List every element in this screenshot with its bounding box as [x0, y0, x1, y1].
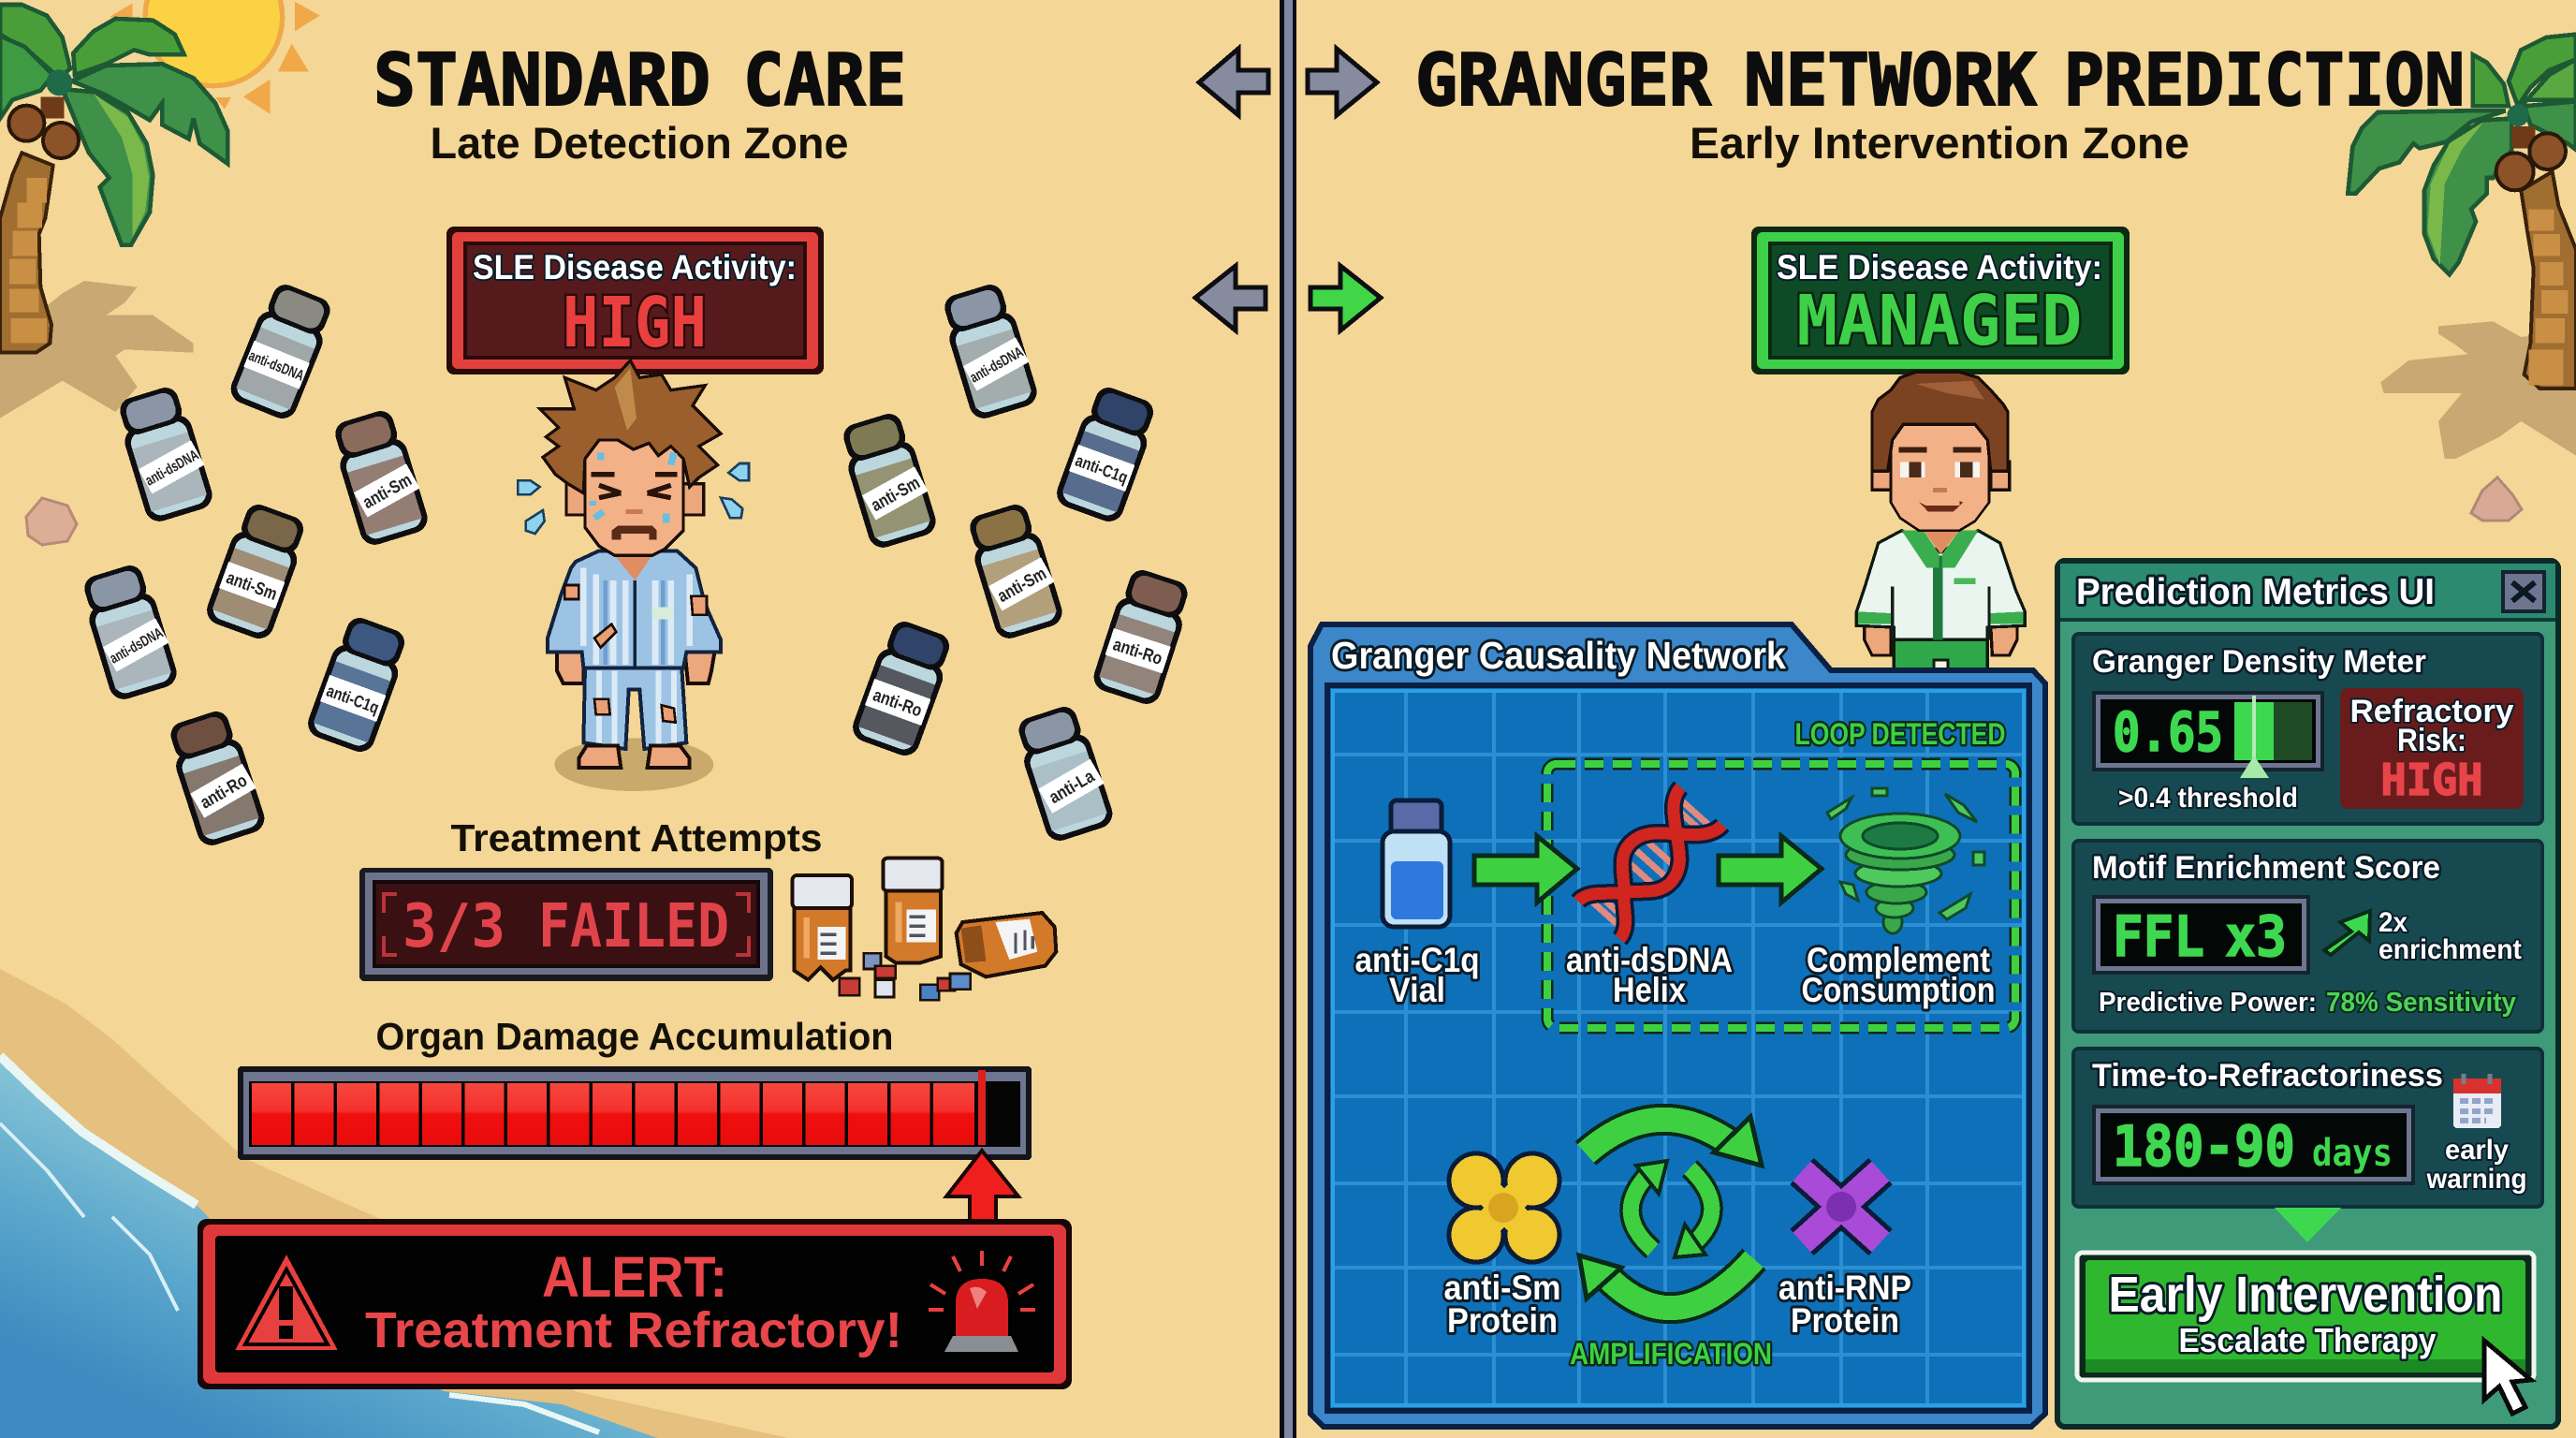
organ damage heading: Organ Damage Accumulation	[376, 1015, 893, 1058]
status box: high disease activity	[446, 227, 824, 374]
vial: anti-C1q 2: anti-C1q	[1073, 451, 1131, 487]
title: granger network prediction: GRANGER	[1415, 39, 1712, 123]
label: anti-C1q vial: anti-C1q	[1355, 941, 1479, 979]
vial: anti-Sm 3	[836, 409, 940, 551]
alert panel: treatment refractory: ALERT:	[542, 1245, 727, 1309]
label: anti-dsDNA helix: anti-dsDNA	[1566, 941, 1733, 979]
vial: anti-dsDNA 4	[937, 280, 1041, 422]
button: early intervention	[2077, 1253, 2534, 1380]
label: complement consumption: Complement	[1807, 941, 1990, 979]
metric card: granger density meter: HIGH	[2381, 755, 2482, 805]
label: anti-dsDNA helix: Helix	[1613, 971, 1686, 1009]
arrow: grey left lower	[1195, 266, 1266, 330]
metric card: time to refractoriness: early	[2445, 1135, 2509, 1166]
seashell left	[26, 498, 77, 545]
sun	[110, 0, 320, 114]
vial: anti-dsDNA 2	[112, 383, 216, 525]
metric card: time to refractoriness: days	[2312, 1132, 2393, 1175]
LED display: 3/3 failed: 3/3	[402, 892, 505, 961]
metric card: motif enrichment score: FFL	[2113, 904, 2204, 970]
status box: managed disease activity: SLE Disease Activity:	[1777, 248, 2102, 286]
vial: anti-Ro 3: anti-Ro	[871, 685, 925, 721]
heading: prediction metrics ui: Prediction Metrics UI	[2076, 572, 2435, 612]
icon: anti-C1q vial	[1383, 800, 1450, 927]
label: anti-RNP protein: Protein	[1791, 1301, 1899, 1340]
vial: anti-Sm 1: anti-Sm	[359, 470, 416, 513]
LED display: 3/3 failed: FAILED	[538, 892, 729, 961]
metric card: motif enrichment score: x3	[2225, 904, 2287, 970]
metric card: time to refractoriness: 180-90	[2113, 1114, 2295, 1180]
label: amplification: AMPLIFICATION	[1570, 1337, 1772, 1371]
close button	[2503, 572, 2544, 611]
heading: granger causality network: Granger Causality Network	[1331, 634, 1786, 677]
vial: anti-dsDNA 4: anti-dsDNA	[968, 345, 1026, 387]
progress bar: organ damage	[238, 1066, 1032, 1160]
patient character	[518, 360, 749, 791]
vial: anti-Ro 3	[849, 616, 958, 759]
arrow: vial to helix	[1474, 836, 1577, 902]
metric card: motif enrichment score: enrichment	[2378, 934, 2522, 965]
icon: dna helix	[1578, 787, 1722, 939]
vial: anti-La	[1011, 702, 1117, 844]
label: loop detected: LOOP DETECTED	[1795, 717, 2005, 751]
alert panel: treatment refractory	[198, 1219, 1072, 1389]
wet sand shoreline	[0, 969, 788, 1438]
subtitle: early intervention zone: Early Intervention Zone	[1690, 118, 2189, 168]
metric card: time to refractoriness	[2073, 1049, 2542, 1207]
label: anti-Sm protein: anti-Sm	[1443, 1269, 1561, 1307]
button: early intervention: Early Intervention	[2108, 1267, 2503, 1323]
palm shadow right	[2380, 321, 2576, 459]
vial: anti-Sm 4	[962, 500, 1066, 642]
label: anti-C1q vial	[1355, 941, 1479, 1009]
arrow: grey right upper	[1308, 49, 1377, 115]
arrow: green right lower	[1310, 266, 1381, 330]
icon: mouse cursor	[2484, 1341, 2531, 1414]
LED display: 3/3 failed	[359, 868, 773, 981]
arrow: metrics to intervention	[2275, 1208, 2341, 1242]
treatment attempts heading: Treatment Attempts	[451, 816, 822, 859]
panel: prediction metrics ui	[2057, 561, 2558, 1427]
label: anti-RNP protein	[1778, 1269, 1911, 1340]
subtitle: late detection zone: Late Detection Zone	[431, 118, 848, 168]
dashed loop region	[1547, 764, 2015, 1028]
icon: floating antibody vials	[77, 279, 1195, 849]
metric card: granger density meter	[2073, 634, 2542, 824]
vial: anti-Ro 1: anti-Ro	[198, 770, 251, 814]
icon: spilled pill bottles	[793, 858, 1056, 1000]
vial: anti-Sm 2	[203, 499, 312, 642]
status box: high disease activity: SLE Disease Activity:	[473, 248, 797, 286]
panel: granger causality network	[1310, 624, 2045, 1427]
arrow: grey left upper	[1199, 49, 1268, 115]
doctor character	[1856, 372, 2025, 671]
palm shadow left	[0, 281, 194, 418]
metric card: motif enrichment score: Motif Enrichment Score	[2092, 850, 2440, 886]
ocean water	[0, 1056, 657, 1438]
status box: managed disease activity	[1751, 227, 2130, 374]
metric card: motif enrichment score: 78% Sensitivity	[2326, 988, 2516, 1018]
vial: anti-Sm 3: anti-Sm	[868, 473, 924, 516]
palm tree right	[2348, 35, 2576, 389]
label: anti-C1q vial: Vial	[1389, 971, 1445, 1009]
title: granger network prediction: NETWORK	[1744, 39, 2038, 123]
title: standard care	[373, 39, 906, 123]
label: complement consumption: Consumption	[1801, 971, 1996, 1009]
arrow: alert pointing to threshold	[946, 1151, 1018, 1224]
metric card: motif enrichment score: 2x	[2378, 907, 2408, 938]
vial: anti-Ro 1	[163, 707, 269, 849]
central divider	[1280, 0, 1296, 1438]
vial: anti-Sm 4: anti-Sm	[994, 564, 1050, 607]
metric card: granger density meter: 0.65	[2113, 700, 2223, 764]
metric card: granger density meter: Risk:	[2397, 723, 2466, 758]
arrow: helix to complement	[1719, 836, 1822, 902]
title: granger network prediction	[1415, 39, 2465, 123]
metric card: granger density meter: Refractory	[2349, 694, 2514, 729]
icon: warning triangle	[232, 1251, 341, 1352]
vial: anti-dsDNA 3: anti-dsDNA	[108, 625, 166, 668]
vial: anti-C1q 1: anti-C1q	[324, 682, 382, 717]
vial: anti-dsDNA 2: anti-dsDNA	[143, 448, 201, 490]
metric card: motif enrichment score	[2073, 841, 2542, 1032]
metric card: granger density meter: Granger Density Meter	[2092, 644, 2426, 680]
palm tree left	[0, 5, 227, 353]
vial: anti-Ro 2	[1090, 565, 1195, 708]
metric card: granger density meter: >0.4 threshold	[2118, 783, 2298, 814]
vial: anti-Sm 1	[328, 406, 432, 549]
vial: anti-Sm 2: anti-Sm	[224, 568, 280, 605]
title: standard care: STANDARD	[373, 39, 710, 123]
metric card: time to refractoriness: Time-to-Refractoriness	[2092, 1058, 2443, 1093]
vial: anti-dsDNA 1: anti-dsDNA	[246, 348, 306, 385]
vial: anti-dsDNA 1	[227, 279, 338, 423]
button: early intervention: Escalate Therapy	[2179, 1321, 2436, 1359]
vial: anti-C1q 1	[304, 612, 413, 756]
amplification cycle arrows	[1579, 1117, 1762, 1308]
metric card: time to refractoriness: warning	[2426, 1164, 2527, 1195]
icon: siren	[929, 1251, 1035, 1352]
icon: green tornado	[1827, 788, 1984, 933]
label: anti-Sm protein	[1443, 1269, 1561, 1340]
title: granger network prediction: PREDICTION	[2064, 39, 2465, 123]
metric card: motif enrichment score: Predictive Power:	[2099, 988, 2317, 1018]
icon: purple anti-RNP protein	[1802, 1171, 1881, 1242]
label: anti-Sm protein: Protein	[1447, 1301, 1558, 1340]
label: anti-dsDNA helix	[1566, 941, 1733, 1009]
label: complement consumption	[1801, 941, 1996, 1009]
seashell right	[2471, 477, 2522, 521]
label: anti-RNP protein: anti-RNP	[1778, 1269, 1911, 1307]
alert panel: treatment refractory: Treatment Refractory!	[365, 1302, 902, 1358]
vial: anti-La: anti-La	[1046, 767, 1098, 808]
status box: high disease activity: HIGH	[563, 283, 707, 363]
vial: anti-dsDNA 3	[77, 561, 181, 703]
title: standard care: CARE	[743, 39, 906, 123]
status box: managed disease activity: MANAGED	[1797, 281, 2082, 361]
vial: anti-C1q 2	[1053, 382, 1162, 525]
icon: yellow anti-Sm protein	[1449, 1153, 1559, 1262]
vial: anti-Ro 2: anti-Ro	[1110, 635, 1164, 669]
icon: calendar	[2453, 1074, 2501, 1128]
